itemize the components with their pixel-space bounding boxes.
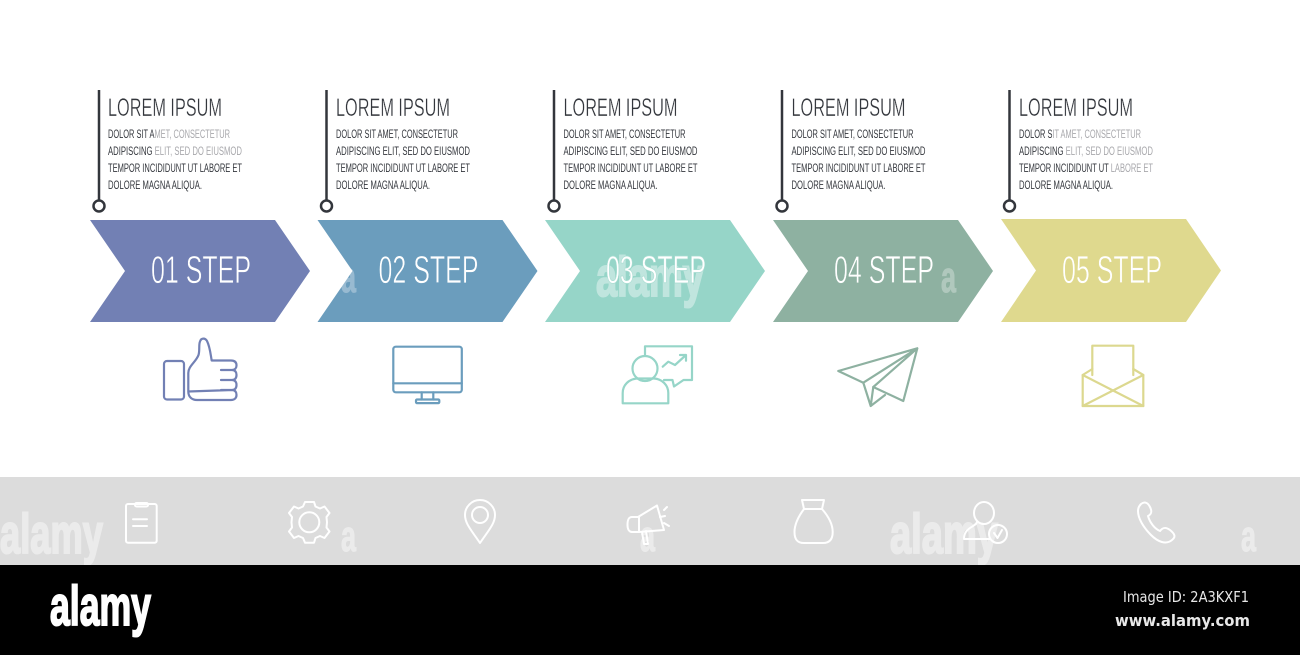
text block 3: DOLOR SIT AMET, CONSECTETUR [564, 129, 686, 141]
text block 2: ADIPISCING ELIT, SED DO EIUSMOD [336, 146, 470, 158]
icon: location pin [465, 500, 495, 543]
watermark: band centre right: alamy [890, 502, 998, 565]
arrow: 03 step: alamy [596, 245, 704, 308]
text block 4 [776, 90, 926, 212]
icon: monitor [393, 347, 462, 403]
text block 4: TEMPOR INCIDIDUNT UT LABORE ET [792, 163, 926, 175]
text block 4: LOREM IPSUM [792, 94, 906, 122]
text block 1: TEMPOR INCIDIDUNT UT LABORE ET [108, 163, 242, 175]
watermark: band small a: a [341, 512, 356, 561]
text block 2: TEMPOR INCIDIDUNT UT LABORE ET [336, 163, 470, 175]
text block 1: LOREM IPSUM [108, 94, 222, 122]
watermark: band left: alamy [0, 502, 103, 565]
text block 3 [548, 90, 698, 212]
text block 5 [1004, 90, 1153, 212]
arrow: 04 step [773, 220, 993, 322]
icon: paper plane [838, 348, 917, 406]
icon: user with check [964, 502, 1007, 543]
icon: thumbs up [164, 339, 236, 400]
text block 4: DOLOR SIT AMET, CONSECTETUR [792, 129, 914, 141]
icon: clipboard [126, 503, 157, 543]
alamy logo: alamy [50, 574, 151, 637]
text block 1: DOLOR SIT AMET, CONSECTETUR [108, 129, 230, 141]
website: www.alamy.com [1115, 611, 1250, 630]
arrow: 03 step: 03 STEP [606, 249, 706, 292]
watermark: band small a 2: a [640, 512, 655, 561]
arrow: 02 step: a [341, 253, 356, 302]
text block 2 [321, 90, 470, 212]
arrow: 05 step: 05 STEP [1062, 249, 1162, 292]
arrow: 01 step [90, 220, 310, 322]
grey icon band [0, 477, 1300, 565]
text block 5: LOREM IPSUM [1019, 94, 1133, 122]
icon: money bag [794, 500, 833, 543]
text block 5: ADIPISCING ELIT, SED DO EIUSMOD [1019, 146, 1153, 158]
arrow: 04 step: 04 STEP [834, 249, 934, 292]
icon: presenter with chart [623, 346, 692, 403]
text block 4: ADIPISCING ELIT, SED DO EIUSMOD [792, 146, 926, 158]
arrow: 03 step [545, 220, 765, 322]
icon: megaphone [628, 506, 669, 544]
text block 1 [94, 90, 242, 212]
text block 2: LOREM IPSUM [336, 94, 450, 122]
text block 3: ADIPISCING ELIT, SED DO EIUSMOD [564, 146, 698, 158]
text block 3: TEMPOR INCIDIDUNT UT LABORE ET [564, 163, 698, 175]
arrow: 02 step: 02 STEP [378, 249, 478, 292]
text block 2: DOLOR SIT AMET, CONSECTETUR [336, 129, 458, 141]
icon: open envelope [1083, 346, 1143, 406]
icon: gear [289, 502, 330, 543]
text block 5: DOLORE MAGNA ALIQUA. [1019, 180, 1113, 192]
text block 2: DOLORE MAGNA ALIQUA. [336, 180, 430, 192]
text block 1: ADIPISCING ELIT, SED DO EIUSMOD [108, 146, 242, 158]
icon: phone [1138, 503, 1174, 542]
watermark: band small a 3: a [1241, 512, 1256, 561]
arrow: 01 step: 01 STEP [151, 249, 251, 292]
text block 5: TEMPOR INCIDIDUNT UT LABORE ET [1019, 163, 1153, 175]
text block 3: LOREM IPSUM [564, 94, 678, 122]
arrow: 05 step [1001, 219, 1221, 322]
black footer [0, 565, 1300, 655]
text block 1: DOLORE MAGNA ALIQUA. [108, 180, 202, 192]
text block 4: DOLORE MAGNA ALIQUA. [792, 180, 886, 192]
arrow: 04 step: a [941, 253, 956, 302]
arrow: 02 step [318, 220, 538, 322]
text block 5: DOLOR SIT AMET, CONSECTETUR [1019, 129, 1141, 141]
text block 3: DOLORE MAGNA ALIQUA. [564, 180, 658, 192]
image id: Image ID: 2A3KXF1 [1123, 588, 1249, 606]
